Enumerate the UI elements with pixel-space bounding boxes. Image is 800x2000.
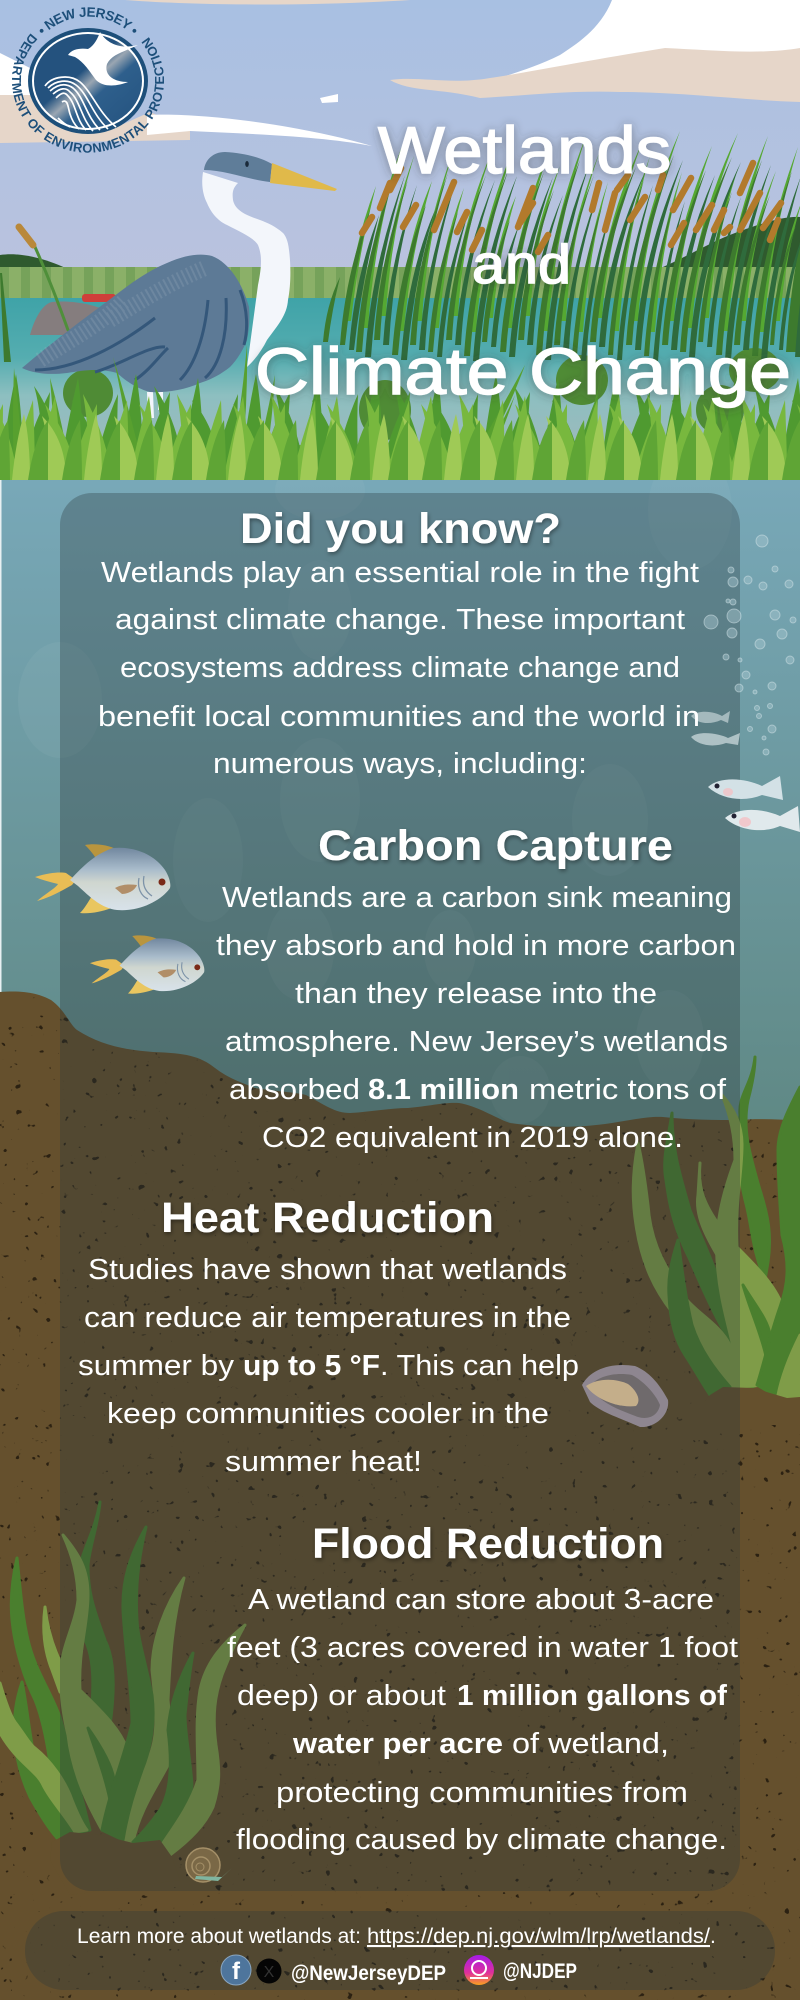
carbon capture text: than they release into the: [295, 978, 657, 1010]
logo ring text: [35, 17, 141, 46]
hero illustration: [0, 0, 800, 480]
icon: facebook: f: [232, 1958, 241, 1985]
boat and rock: [30, 294, 116, 335]
carbon capture text: [216, 882, 736, 1154]
heat reduction text: can reduce air temperatures in the: [84, 1302, 571, 1334]
content panel: [60, 493, 740, 1891]
seaweed: left cluster: [0, 1502, 245, 1895]
air bubbles: [704, 535, 796, 755]
heat reduction text: summer by: [78, 1350, 235, 1382]
icon: oyster: [582, 1365, 668, 1427]
icon: facebook: [221, 1955, 251, 1985]
fish: small fish group: [691, 711, 800, 832]
flood reduction text: feet (3 acres covered in water 1 foot: [227, 1632, 738, 1664]
carbon capture text: absorbed: [229, 1074, 360, 1106]
flood reduction text: 1 million gallons of: [457, 1680, 727, 1712]
flood reduction text: [227, 1584, 738, 1856]
logo: NJ Department of Environmental Protection: DEPARTMENT OF ENVIRONMENTAL PROTECTION: [12, 34, 164, 153]
icon: instagram: [464, 1955, 494, 1985]
intro text: numerous ways, including:: [213, 748, 587, 780]
carbon capture text: atmosphere. New Jersey’s wetlands: [225, 1026, 728, 1058]
cattails: [362, 163, 781, 252]
icon: X: [256, 1958, 282, 1984]
intro text: Wetlands play an essential role in the fight: [101, 557, 699, 589]
footer link line: Learn more about wetlands at:: [77, 1925, 361, 1948]
icon: X: X: [264, 1964, 275, 1981]
hero title: Climate Change: [255, 334, 791, 408]
flood reduction text: flooding caused by climate change.: [236, 1824, 727, 1856]
heading: did you know: Did you know?: [240, 505, 561, 553]
social handle: New Jersey DEP: @NewJerseyDEP: [291, 1962, 446, 1985]
logo: NJ Department of Environmental Protection: • NEW JERSEY •: [40, 7, 136, 33]
flood reduction text: protecting communities from: [276, 1777, 688, 1809]
lake: [0, 298, 800, 448]
heat reduction text: . This can help: [380, 1350, 579, 1382]
sky: [0, 0, 800, 300]
hero title: Wetlands: [378, 113, 671, 187]
heat reduction text: [78, 1254, 579, 1478]
seaweed: right cluster: [633, 1057, 800, 1425]
intro text: benefit local communities and the world in: [98, 701, 700, 733]
reeds: [0, 131, 800, 362]
clouds: [0, 0, 800, 146]
carbon capture text: Wetlands are a carbon sink meaning: [222, 882, 732, 914]
logo bird: [68, 32, 138, 86]
hero title: [255, 113, 791, 408]
heat reduction text: up to 5 °F: [243, 1350, 380, 1382]
left cattail: [19, 227, 68, 330]
footer bar: [25, 1911, 775, 1990]
social handle: NJDEP: @NJDEP: [503, 1960, 577, 1983]
foreground grass: [0, 345, 800, 480]
heading: flood reduction: Flood Reduction: [312, 1520, 664, 1568]
flood reduction text: A wetland can store about 3-acre: [248, 1584, 714, 1616]
carbon capture text: CO2 equivalent in 2019 alone.: [262, 1122, 683, 1154]
heat reduction text: summer heat!: [225, 1446, 422, 1478]
heading: carbon capture: Carbon Capture: [318, 822, 673, 870]
footer link line: [77, 1925, 716, 1948]
carbon capture text: they absorb and hold in more carbon: [216, 930, 736, 962]
intro text: ecosystems address climate change and: [120, 652, 680, 684]
carbon capture text: metric tons of: [529, 1074, 727, 1106]
distant treeline: [0, 217, 800, 298]
flood reduction text: water per acre: [292, 1728, 503, 1760]
heat reduction text: Studies have shown that wetlands: [88, 1254, 567, 1286]
background: underwater: [0, 480, 800, 1140]
icon: snail: [186, 1848, 232, 1882]
fish: second pompano: [90, 935, 204, 994]
logo wave: [45, 77, 116, 131]
flood reduction text: of wetland,: [512, 1728, 669, 1760]
heading: heat reduction: Heat Reduction: [161, 1194, 494, 1242]
heat reduction text: keep communities cooler in the: [107, 1398, 549, 1430]
carbon capture text: 8.1 million: [368, 1074, 519, 1106]
heron: [22, 152, 337, 418]
bushes: [63, 348, 781, 440]
intro text: against climate change. These important: [115, 604, 685, 636]
fish: large pompano: [35, 844, 170, 913]
soil ground: [0, 991, 800, 2000]
hero title: and: [472, 233, 571, 295]
faint background bubbles: [18, 450, 732, 1124]
intro text: [98, 557, 700, 780]
flood reduction text: deep) or about: [237, 1680, 446, 1712]
footer link line: .: [710, 1925, 716, 1948]
footer link line: https://dep.nj.gov/wlm/lrp/wetlands/: [367, 1925, 710, 1948]
